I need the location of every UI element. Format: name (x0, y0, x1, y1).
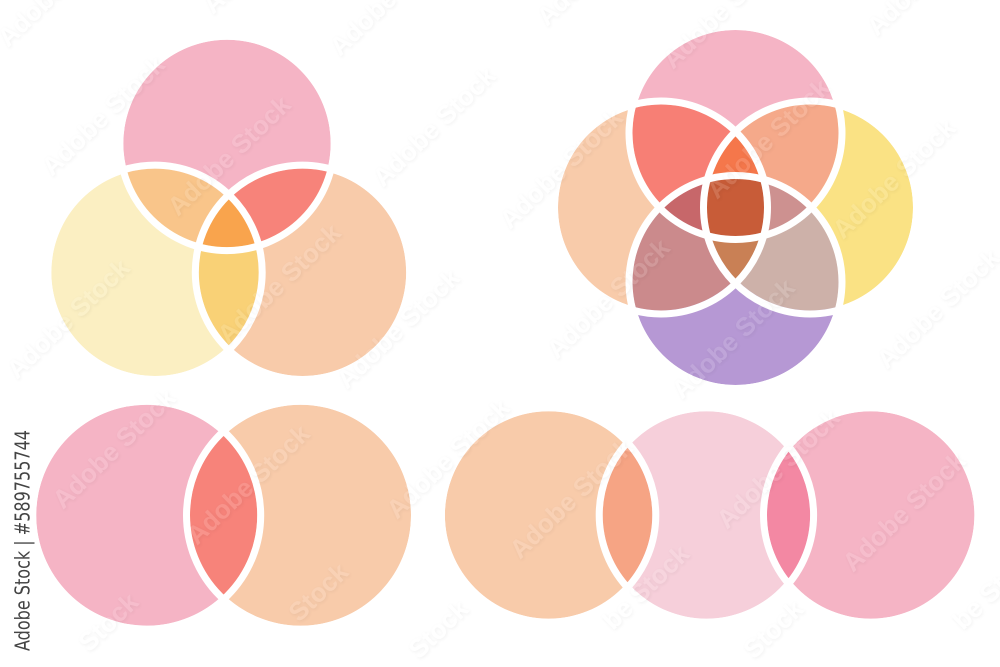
stock watermark pattern: Adobe Stock (380, 392, 516, 524)
overlap: top and right (740, 104, 838, 202)
stock watermark pattern: Stock (72, 586, 144, 657)
overlap: orange lens (602, 448, 652, 582)
circle: pink top (632, 30, 838, 236)
three-circle chain venn diagram (441, 408, 978, 622)
stock watermark pattern: be Stock (596, 538, 696, 635)
stock watermark pattern: Adobe Stock (540, 232, 676, 364)
white outline rings (441, 408, 978, 622)
overlap: bottom and right (740, 212, 838, 310)
stock watermark pattern: Adobe Stock (826, 112, 962, 244)
overlap: bottom and left (632, 210, 732, 310)
stock watermark pattern: Adobe Stock (700, 72, 836, 204)
overlap: centre of all four (707, 179, 764, 236)
stock watermark pattern: Stock (282, 556, 354, 627)
circle: pink top (123, 40, 331, 247)
overlap: top, left and right (712, 136, 758, 181)
overlap: top and left (128, 168, 224, 242)
stock watermark pattern: Adobe Stock (710, 402, 846, 534)
circle: pale yellow left (51, 169, 259, 376)
stock watermark pattern: Adobe Stock (493, 102, 629, 234)
overlap: rose lens (767, 452, 810, 578)
vertical stock id caption: Adobe Stock | #589755744 (10, 430, 34, 651)
stock watermark pattern: Adobe Stock (35, 49, 171, 181)
circle: yellow right (707, 104, 913, 310)
stock watermark pattern: Adobe Stock (665, 272, 801, 404)
overlap: coral lens (190, 436, 258, 594)
circle: peach left (445, 411, 652, 619)
four-circle venn diagram (554, 26, 916, 388)
overlap: top and right (232, 168, 327, 242)
stock watermark pattern: Adobe Stock (503, 432, 639, 564)
circle: peach right (199, 169, 406, 376)
overlap: top and left (632, 104, 734, 206)
stock watermark pattern: Adobe Stock (0, 252, 136, 384)
white outline rings (554, 26, 916, 388)
stock watermark pattern: Adobe Stock (161, 89, 297, 221)
circle: peach left (558, 104, 764, 310)
stock watermark pattern: Adobe Stock (180, 418, 316, 550)
stock watermark pattern: Adobe Stock (211, 217, 347, 349)
circle: purple bottom (632, 179, 838, 385)
two-circle venn diagram (33, 401, 414, 629)
white outline rings (48, 36, 410, 379)
stock watermark pattern: Adobe Stock (46, 382, 182, 514)
stock watermark pattern: Stock (402, 593, 474, 664)
overlap: top, bottom and left (664, 184, 702, 230)
circle: pink right (767, 411, 974, 619)
overlap: centre of all three (203, 200, 254, 247)
stock watermark pattern: Adobe Stock (836, 445, 972, 577)
overlap: bottom, left and right (712, 235, 758, 278)
circle: peach right (190, 405, 411, 626)
circle: pink left (36, 405, 257, 626)
stock watermark pattern: Stock (737, 593, 809, 664)
stock watermark pattern: Adobe Stock (366, 60, 502, 192)
overlap: left and right (198, 200, 258, 345)
overlap: top, bottom and right (761, 184, 806, 231)
white outline rings (33, 401, 414, 629)
three-circle venn diagram (48, 36, 410, 379)
stock watermark pattern: Adobe Stock (330, 262, 466, 394)
circle: light pink middle (603, 411, 810, 619)
